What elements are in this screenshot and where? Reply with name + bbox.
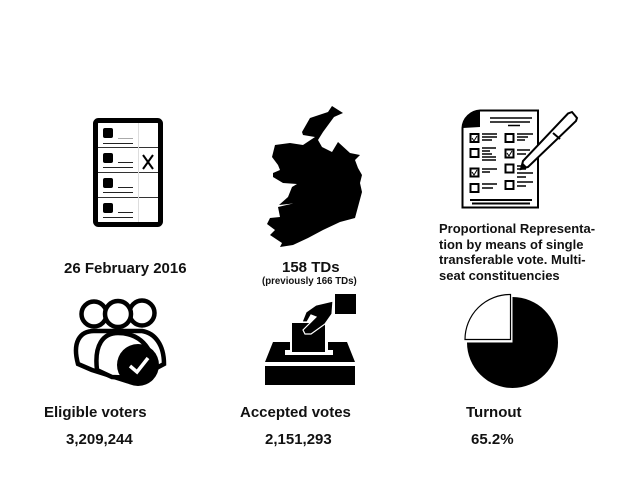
electoral system description: transferable vote. Multi-	[439, 252, 586, 267]
turnout label: Turnout	[466, 404, 522, 421]
turnout value: 65.2%	[471, 431, 514, 448]
seats label: 158 TDs	[282, 259, 340, 276]
date label: 26 February 2016	[64, 260, 187, 277]
icon: ballot paper	[96, 120, 160, 224]
icon: hand casting vote in ballot box	[265, 294, 356, 385]
accepted votes value: 2,151,293	[265, 431, 332, 448]
eligible voters label: Eligible voters	[44, 404, 147, 421]
previous seats note: (previously 166 TDs)	[262, 276, 357, 287]
icon: map of Ireland	[267, 106, 362, 247]
chart: turnout pie	[465, 294, 558, 388]
electoral system description: Proportional Representa-	[439, 221, 595, 236]
icon: ballot form with pen	[462, 110, 577, 208]
eligible voters value: 3,209,244	[66, 431, 133, 448]
icon: group of voters with check mark	[76, 300, 164, 386]
electoral system description	[439, 221, 595, 282]
electoral system description: tion by means of single	[439, 236, 583, 252]
accepted votes label: Accepted votes	[240, 404, 351, 421]
electoral system description: seat constituencies	[439, 268, 560, 282]
